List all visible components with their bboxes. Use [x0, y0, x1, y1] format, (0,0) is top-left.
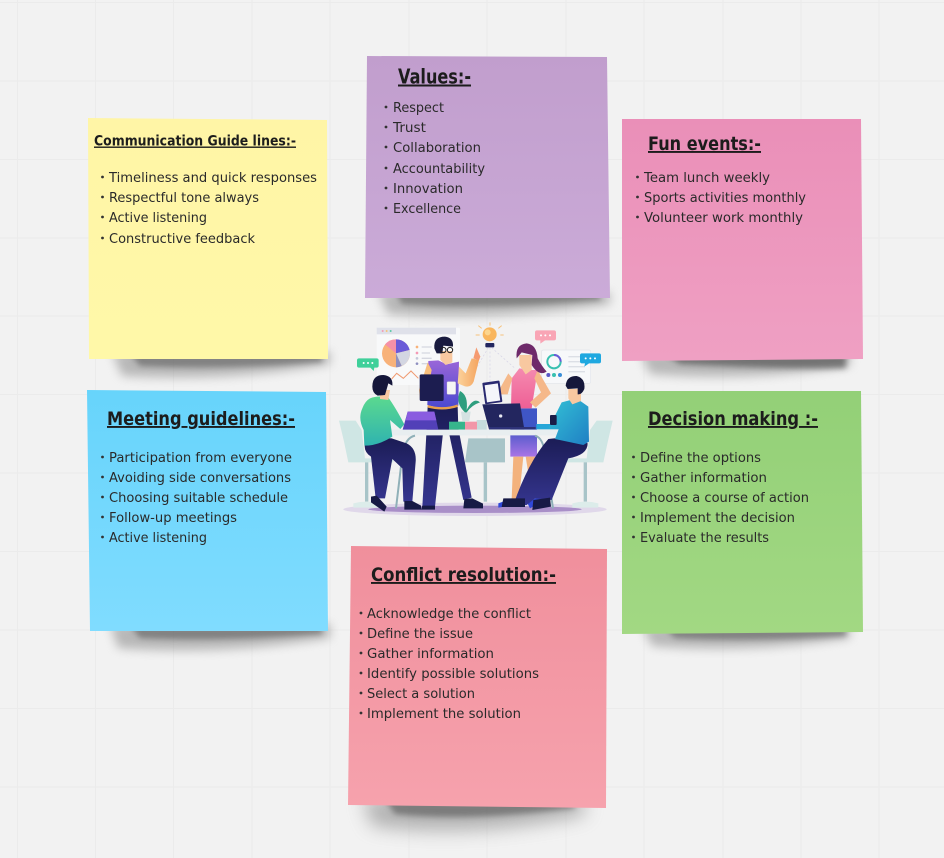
list: communication guidelines: Respectful tone always — [109, 190, 259, 206]
panel: values — [365, 56, 610, 298]
list: values: Innovation — [393, 181, 463, 197]
list: conflict resolution: Select a solution — [367, 686, 475, 702]
seated woman — [360, 375, 421, 512]
list: meeting guidelines: Avoiding side conversations — [109, 470, 291, 486]
list: meeting guidelines — [101, 450, 292, 546]
man standing — [419, 337, 483, 510]
list: meeting guidelines: Follow-up meetings — [109, 510, 237, 526]
list: values: Respect — [393, 100, 444, 116]
list: conflict resolution — [360, 606, 539, 722]
ground — [343, 503, 607, 516]
list: communication guidelines: Constructive feedback — [109, 231, 255, 247]
list: values — [385, 100, 485, 217]
chairs — [339, 420, 613, 508]
panel: communication guidelines — [88, 118, 328, 359]
list: fun events — [636, 170, 806, 226]
list: decision making: Define the options — [640, 450, 761, 466]
panel: meeting guidelines — [87, 390, 328, 631]
list: conflict resolution: Gather information — [367, 646, 494, 662]
heading: conflict resolution: Conflict resolution:- — [371, 564, 556, 586]
woman standing — [482, 343, 551, 508]
list: decision making: Gather information — [640, 470, 767, 486]
list: meeting guidelines: Choosing suitable schedule — [109, 490, 288, 506]
list: fun events: Sports activities monthly — [644, 190, 806, 206]
list: conflict resolution: Identify possible solutions — [367, 666, 539, 682]
heading: communication guidelines: Communication Guide lines:- — [94, 134, 296, 150]
list: decision making — [632, 450, 809, 546]
list: decision making: Choose a course of action — [640, 490, 809, 506]
heading: meeting guidelines: Meeting guidelines:- — [107, 408, 295, 430]
panel: conflict resolution — [348, 546, 607, 808]
list: conflict resolution: Implement the solution — [367, 706, 521, 722]
dashboard board — [542, 350, 591, 383]
list: fun events: Volunteer work monthly — [644, 210, 803, 226]
list: communication guidelines: Timeliness and quick responses — [108, 170, 317, 186]
seated man — [502, 376, 589, 510]
list: values: Accountability — [393, 161, 485, 177]
heading: fun events: Fun events:- — [648, 133, 761, 155]
list: fun events: Team lunch weekly — [643, 170, 770, 186]
heading: decision making: Decision making :- — [648, 408, 818, 430]
list: conflict resolution: Define the issue — [367, 626, 473, 642]
plant and books — [449, 391, 480, 430]
chart board — [377, 328, 460, 385]
note shadows — [110, 292, 850, 831]
panel: fun events — [622, 119, 863, 361]
list: values: Collaboration — [393, 140, 481, 156]
list: values: Trust — [392, 120, 426, 136]
list: meeting guidelines: Active listening — [109, 530, 207, 546]
list: decision making: Evaluate the results — [640, 530, 769, 546]
list: communication guidelines — [101, 170, 317, 247]
speech bubbles — [357, 330, 601, 371]
list: values: Excellence — [393, 201, 461, 217]
list: decision making: Implement the decision — [640, 510, 795, 526]
light bulb — [468, 322, 515, 382]
list: conflict resolution: Acknowledge the conflict — [367, 606, 531, 622]
panel: decision making — [622, 391, 863, 634]
list: communication guidelines: Active listening — [109, 210, 207, 226]
table with laptops — [388, 403, 563, 508]
illustration: team meeting around a table — [339, 322, 613, 516]
heading: values: Values:- — [398, 64, 471, 88]
list: meeting guidelines: Participation from everyone — [109, 450, 292, 466]
